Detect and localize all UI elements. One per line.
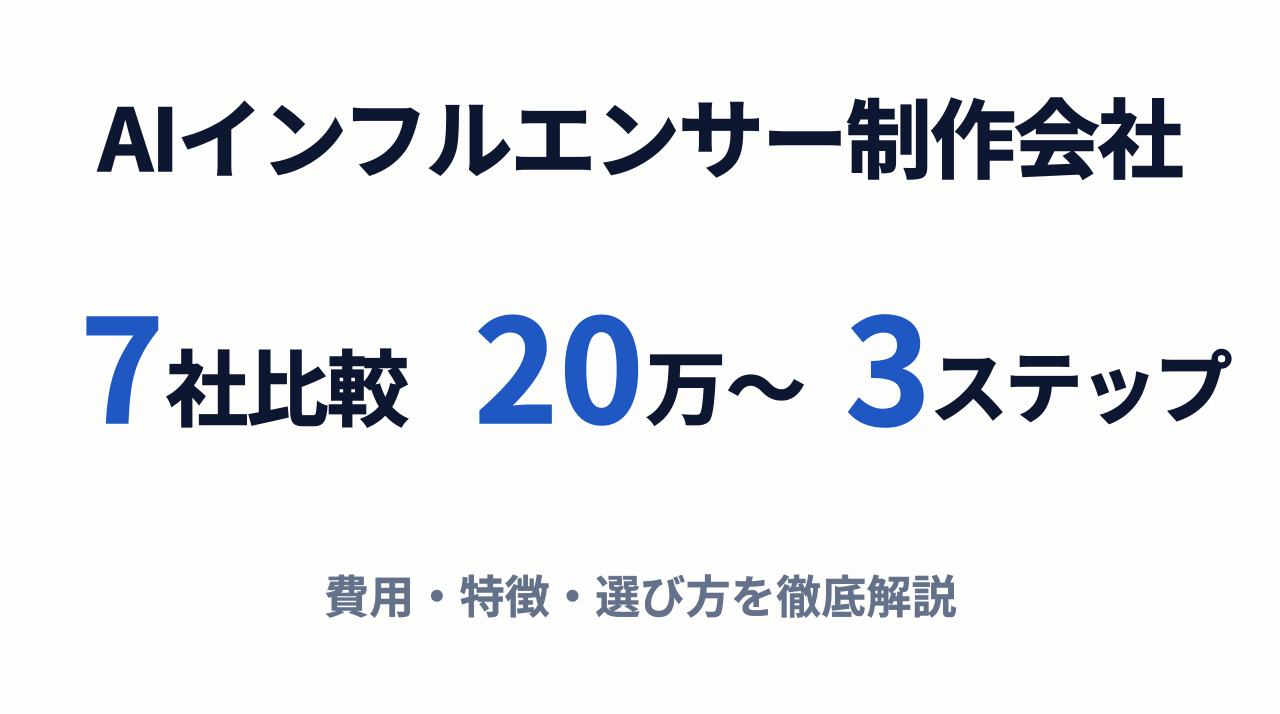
number 20: 20 xyxy=(474,258,645,465)
label ステップ: ステップ xyxy=(930,327,1229,439)
stat: 3ステップ xyxy=(845,257,1232,468)
number 3: 3 xyxy=(845,257,931,468)
title: AIインフルエンサー制作会社 xyxy=(98,71,1182,196)
label 万~: 万〜 xyxy=(646,326,806,442)
subtitle: 費用・特徴・選び方を徹底解説 xyxy=(324,561,957,626)
stat: 7社比較 xyxy=(80,258,409,465)
stat: 20万~ xyxy=(474,258,806,465)
label 社比較: 社比較 xyxy=(166,324,408,443)
number 7: 7 xyxy=(80,258,164,465)
